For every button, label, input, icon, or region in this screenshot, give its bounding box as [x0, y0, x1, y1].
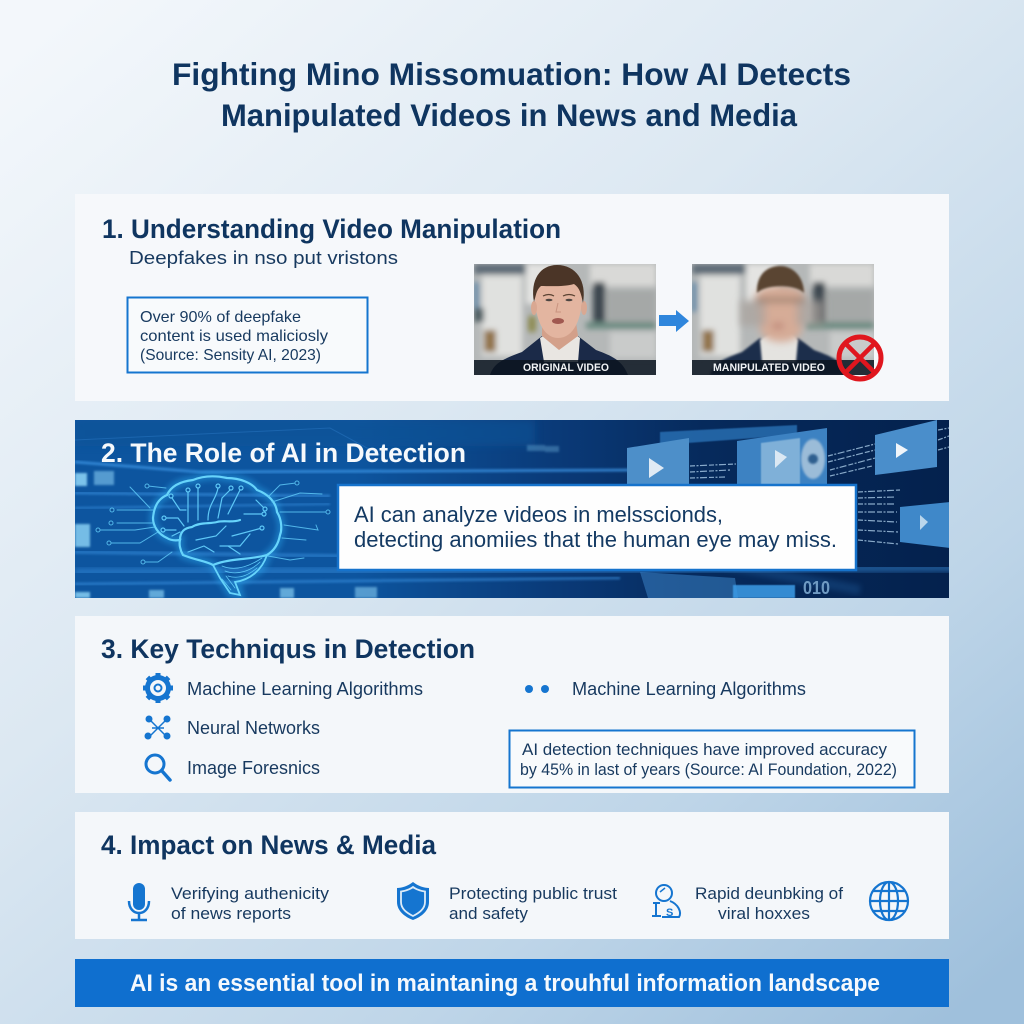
- heading 4: 4. Impact on News & Media: [101, 830, 437, 860]
- data streak background: [75, 420, 960, 598]
- panel: impact on news and media: [75, 812, 949, 939]
- impact: rapid debunking: Rapid deunbking of: [695, 884, 843, 903]
- callout: accuracy statistic: AI detection techniques have improved accuracy: [522, 741, 888, 759]
- icon: magnifier: [146, 755, 170, 780]
- technique: image forensics: [146, 755, 320, 780]
- icon: person with magnifier: S: [666, 907, 673, 919]
- icon: two dots: [525, 685, 549, 693]
- impact: rapid debunking: [652, 884, 843, 923]
- icon: circuit brain: [96, 476, 330, 595]
- cerebellum and brain stem: [213, 555, 267, 595]
- callout: AI analysis speed: [338, 485, 856, 570]
- callout: deepfake statistic: content is used maliciosly: [140, 328, 328, 345]
- icon: network: [145, 716, 170, 739]
- heading 3: 3. Key Techniqus in Detection: [101, 634, 475, 664]
- person: face: [535, 280, 582, 338]
- person: suit: [710, 338, 848, 375]
- video tiles: [627, 420, 950, 598]
- original video still: [474, 264, 656, 375]
- impact: verifying authenticity: [129, 883, 330, 923]
- callout: accuracy statistic: by 45% in last of years (Source: AI Foundation, 2022): [520, 761, 897, 779]
- icon: person with magnifier: [652, 885, 680, 919]
- video tiles: 010: [803, 578, 830, 598]
- title: Manipulated Videos in News and Media: [221, 97, 797, 133]
- title: [172, 56, 851, 133]
- banner: conclusion: [75, 959, 949, 1007]
- callout: deepfake statistic: (Source: Sensity AI, 2023): [140, 347, 321, 364]
- impact: verifying authenticity: of news reports: [171, 904, 291, 923]
- person: neck: [542, 322, 578, 350]
- impact: protecting public trust: [397, 882, 617, 923]
- manipulated video still: [692, 264, 874, 375]
- technique: duplicate machine learning: Machine Learning Algorithms: [572, 679, 806, 699]
- impact: protecting public trust: and safety: [449, 904, 528, 923]
- arrow: [659, 310, 689, 332]
- manipulated video still: MANIPULATED VIDEO: [713, 362, 825, 374]
- person: suit: [490, 336, 628, 375]
- caption strip: [692, 360, 874, 375]
- icon: globe: [870, 882, 908, 920]
- callout: deepfake statistic: [128, 298, 368, 372]
- code snippets: [690, 428, 949, 544]
- original video still: ORIGINAL VIDEO: [523, 362, 609, 374]
- banner: conclusion: AI is an essential tool in maintaning a trouhful information landscape: [130, 970, 880, 997]
- panel: key techniques in detection: [75, 616, 949, 793]
- technique: image forensics: Image Foresnics: [187, 758, 320, 778]
- icon: prohibited cross: [839, 337, 881, 379]
- title: Fighting Mino Missomuation: How AI Detects: [172, 56, 851, 92]
- technique: machine learning: Machine Learning Algorithms: [187, 679, 423, 699]
- panel: the role of AI in detection: [75, 420, 960, 598]
- callout: accuracy statistic: [510, 730, 914, 788]
- impact: rapid debunking: viral hoxxes: [718, 904, 810, 923]
- technique: neural networks: Neural Networks: [187, 718, 320, 738]
- subheading: Deepfakes in nso put vristons: [129, 247, 398, 268]
- icon: microphone: [129, 883, 149, 920]
- technique: neural networks: [145, 716, 320, 739]
- panel: understanding video manipulation: [75, 194, 949, 401]
- impact: verifying authenticity: Verifying authenicity: [171, 884, 330, 903]
- impact: protecting public trust: Protecting public trust: [449, 884, 617, 903]
- heading 1: 1. Understanding Video Manipulation: [102, 214, 561, 244]
- brain circuit leads: [96, 481, 330, 564]
- icon: gear: [143, 673, 173, 703]
- callout: deepfake statistic: Over 90% of deepfake: [140, 309, 301, 326]
- icon: shield: [397, 882, 429, 920]
- technique: machine learning: [143, 673, 423, 703]
- callout: AI analysis speed: AI can analyze videos in melsscionds,: [354, 502, 723, 527]
- person: blurred face: [740, 286, 824, 342]
- heading 2: 2. The Role of AI in Detection: [101, 438, 466, 468]
- callout: AI analysis speed: detecting anomiies that the human eye may miss.: [354, 527, 837, 552]
- caption strip: [474, 360, 656, 375]
